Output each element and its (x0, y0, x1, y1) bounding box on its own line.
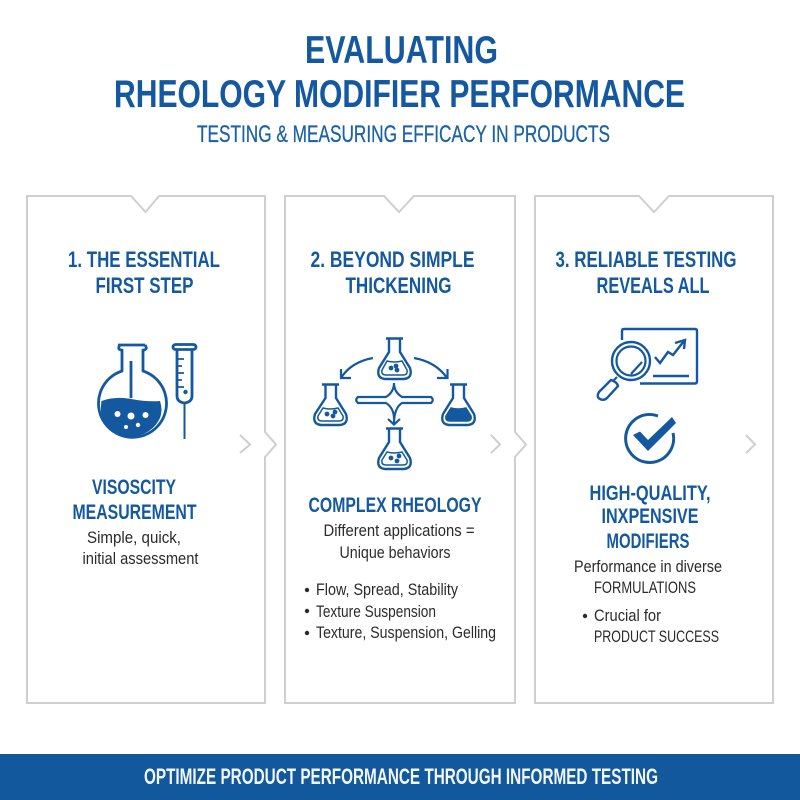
icon: check circle (626, 414, 676, 462)
splitter (356, 383, 433, 424)
panel 3 body text: FORMULATIONS (594, 579, 696, 597)
panel 2 heading (310, 247, 474, 298)
panel 3 heading: 3. RELIABLE TESTING (556, 247, 736, 272)
panel 1 body text: initial assessment (82, 550, 199, 568)
panel 2 heading: 2. BEYOND SIMPLE (310, 247, 474, 272)
panel 1 subheading (72, 476, 197, 524)
panel 2 body text: Unique behaviors (340, 544, 450, 562)
panel 3 heading (556, 247, 736, 298)
panel 3 subheading (590, 482, 710, 553)
panel 3 bullet list (583, 607, 719, 646)
panel 1 outline (27, 196, 276, 703)
panel 3 heading: REVEALS ALL (596, 273, 710, 298)
panel 2 bullet list (305, 581, 496, 642)
chevron (491, 435, 500, 453)
panel 3 bullet list: PRODUCT SUCCESS (594, 628, 719, 646)
title (114, 29, 685, 116)
panel 1 body text (82, 529, 199, 568)
panel: step 3 (535, 196, 773, 703)
panel 3 body text (574, 558, 722, 597)
panel 2 heading: THICKENING (346, 273, 452, 298)
panel 3 outline (535, 196, 773, 703)
panel 1 heading: FIRST STEP (96, 273, 194, 298)
panel 1 subheading: MEASUREMENT (72, 501, 197, 524)
panel 3 subheading: INXPENSIVE (602, 505, 698, 528)
panel 2 outline (285, 196, 526, 703)
icon: flask and syringe (99, 344, 196, 439)
chevron (746, 435, 755, 453)
panel 2 bullet list: Texture Suspension (316, 603, 436, 621)
top flask (378, 338, 411, 379)
panel 3 subheading: HIGH-QUALITY, (590, 482, 710, 505)
bottom flask (378, 428, 411, 469)
arrows (341, 358, 448, 378)
title: EVALUATING (305, 29, 498, 72)
icon: flask network (314, 338, 475, 469)
panel 1 heading: 1. THE ESSENTIAL (68, 247, 220, 272)
panel 2 body text: Different applications = (324, 522, 474, 540)
panel 2 subheading: COMPLEX RHEOLOGY (308, 494, 482, 517)
icon: magnifier and chart (598, 329, 697, 400)
panel: step 1 (27, 196, 276, 703)
panel 3 body text: Performance in diverse (574, 558, 722, 576)
panel 1 subheading: VISOSCITY (92, 476, 176, 499)
panel 1 heading (68, 247, 220, 298)
left flask (314, 384, 347, 425)
panel 3 bullet list: Crucial for (594, 607, 661, 625)
panel 3 subheading: MODIFIERS (606, 530, 690, 553)
panel 2 body text (324, 522, 474, 562)
panel: step 2 (285, 196, 526, 703)
chevron (240, 435, 250, 453)
panel 2 bullet list: Flow, Spread, Stability (316, 581, 459, 599)
footer banner (0, 754, 800, 800)
panel 2 bullet list: Texture, Suspension, Gelling (316, 624, 496, 642)
panel 1 body text: Simple, quick, (87, 529, 181, 547)
right flask (442, 384, 475, 425)
subtitle: TESTING & MEASURING EFFICACY IN PRODUCTS (197, 121, 610, 148)
